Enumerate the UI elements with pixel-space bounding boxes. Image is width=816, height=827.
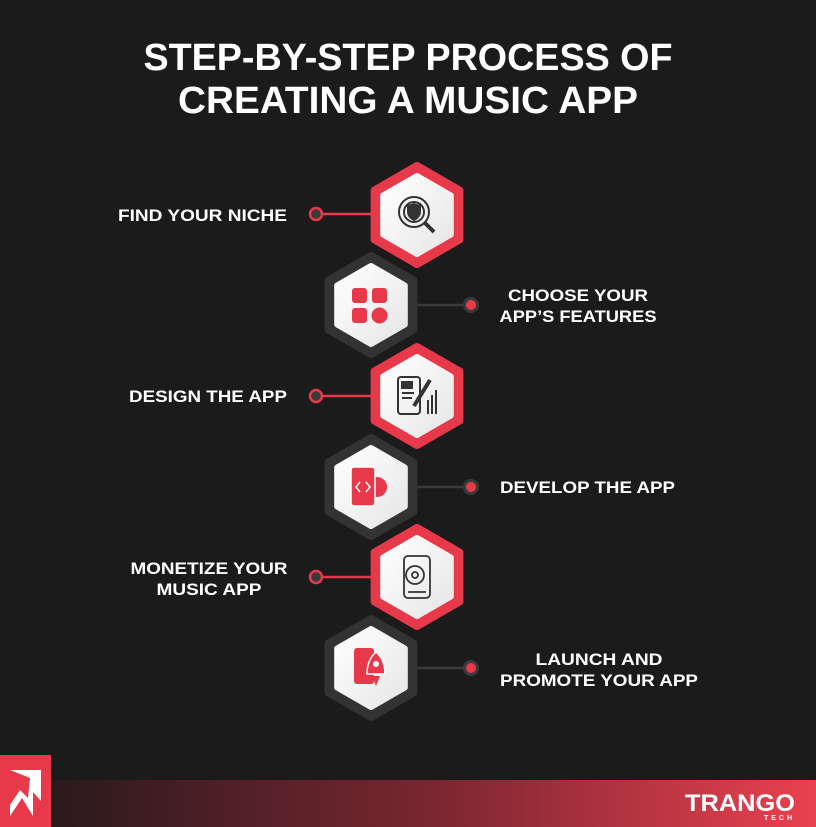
icon: phone rocket — [354, 648, 385, 686]
step 2: choose features — [329, 256, 656, 354]
brand text: TECH — [764, 815, 795, 822]
step 6: launch — [329, 619, 698, 717]
logo square — [0, 755, 51, 827]
step 2: choose features: APP’S FEATURES — [500, 307, 656, 326]
step 5: monetize: MUSIC APP — [156, 580, 262, 599]
icon: phone code gear — [351, 467, 387, 506]
brand text: TRANGO — [685, 790, 795, 817]
step 4: develop the app — [329, 438, 675, 536]
step 4: develop the app: DEVELOP THE APP — [500, 478, 675, 497]
step 1: find your niche — [118, 166, 459, 264]
icon: app grid — [352, 288, 388, 324]
icon: phone with disc — [404, 556, 430, 598]
step 2: choose features: CHOOSE YOUR — [508, 286, 648, 305]
footer bar — [51, 780, 816, 827]
step 6: launch: PROMOTE YOUR APP — [500, 671, 698, 690]
step 1: find your niche: FIND YOUR NICHE — [118, 206, 287, 225]
icon: target magnifier — [399, 197, 434, 232]
step 5: monetize — [130, 528, 459, 626]
step 3: design the app — [129, 347, 459, 445]
icon: phone with pen — [398, 377, 436, 414]
title: CREATING A MUSIC APP — [178, 80, 638, 122]
step 5: monetize: MONETIZE YOUR — [130, 559, 288, 578]
title: STEP-BY-STEP PROCESS OF — [144, 37, 672, 79]
title — [144, 37, 672, 122]
step 6: launch: LAUNCH AND — [536, 650, 662, 669]
step 3: design the app: DESIGN THE APP — [129, 387, 287, 406]
